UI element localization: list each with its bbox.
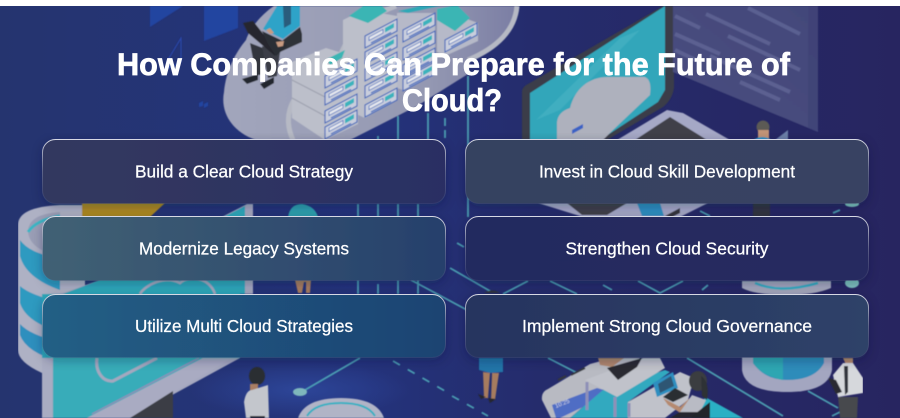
- card: Strengthen Cloud Security: [466, 216, 868, 280]
- network lines: [305, 76, 840, 416]
- top white band: [0, 0, 900, 6]
- card: Invest in Cloud Skill Development: Invest in Cloud Skill Development: [539, 162, 795, 182]
- icon: teal node right: [845, 278, 859, 288]
- device base: [542, 358, 640, 418]
- card: Invest in Cloud Skill Development: [466, 140, 868, 204]
- icon: right cylinder: [742, 281, 832, 392]
- card: Build a Clear Cloud Strategy: [42, 140, 446, 204]
- icon: large cloud: [223, 6, 517, 140]
- icon: woman standing: [244, 367, 269, 418]
- icon: small cylinder: [298, 398, 384, 418]
- rack column one: [292, 48, 358, 140]
- rack column three: [397, 6, 440, 91]
- card: Modernize Legacy Systems: [42, 216, 446, 280]
- title: Cloud?: [402, 82, 502, 118]
- icon: server racks: [292, 6, 478, 140]
- icon: person behind center: [637, 203, 680, 217]
- card: Implement Strong Cloud Governance: [466, 294, 868, 358]
- icon: teal node top right: [844, 203, 860, 208]
- card: Implement Strong Cloud Governance: Implement Strong Cloud Governance: [522, 316, 812, 336]
- icon: woman in blue skirt: [478, 290, 503, 403]
- second desk: [628, 372, 694, 418]
- icon: left cylinder stack: [18, 205, 85, 373]
- card: Strengthen Cloud Security: Strengthen Cloud Security: [566, 238, 769, 258]
- icon: big tablet: [42, 204, 253, 418]
- background glow: [190, 362, 410, 418]
- icon: big laptop: [522, 6, 730, 217]
- card: Utilize Multi Cloud Strategies: Utilize Multi Cloud Strategies: [135, 316, 353, 336]
- icon: teal node: [293, 388, 307, 396]
- card: Build a Clear Cloud Strategy: Build a Clear Cloud Strategy: [135, 162, 353, 182]
- icon: floating blue panels: [150, 6, 238, 108]
- icon: man with clipboard: [828, 358, 863, 418]
- server wall: [673, 6, 818, 132]
- rack column two: [343, 6, 397, 118]
- first desk: [602, 358, 666, 398]
- icon: person behind left cards: [288, 204, 318, 293]
- card: Utilize Multi Cloud Strategies: [42, 294, 446, 358]
- title: [117, 46, 790, 118]
- icon: man behind top right card: [753, 120, 788, 217]
- card: Modernize Legacy Systems: Modernize Legacy Systems: [139, 238, 349, 258]
- icon: desks and workers: [542, 358, 743, 418]
- icon: desks and workers: 10:25: [555, 398, 571, 410]
- rack column four: [437, 6, 478, 56]
- title: How Companies Can Prepare for the Future of: [117, 46, 790, 82]
- icon: yellow shield: [82, 204, 165, 216]
- icon: person with laptop on cloud: [242, 6, 302, 89]
